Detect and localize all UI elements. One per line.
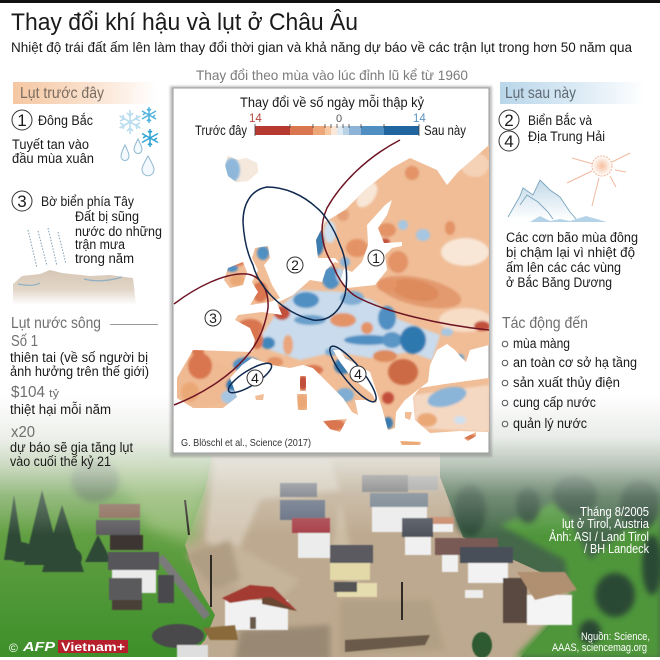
poles (185, 500, 402, 620)
snowmelt text: đầu mùa xuân (12, 151, 94, 166)
Iceland tones (224, 158, 240, 182)
map of Europe (174, 140, 491, 450)
region 3 label: Bờ biển phía Tây (41, 194, 134, 209)
orange patches (274, 306, 290, 320)
logos: AFP (22, 639, 55, 654)
saturated soil text (75, 209, 162, 266)
flood photograph (0, 395, 660, 660)
heading: river floods: Lụt nước sông (11, 315, 101, 332)
flood-timing arcs (174, 140, 489, 407)
heading: impacts: Tác động đến (502, 315, 588, 332)
saturated soil text: trong năm (75, 251, 134, 266)
title: Thay đổi khí hậu và lụt ở Châu Âu (11, 9, 358, 36)
legend: 14 (413, 113, 426, 125)
stat: x20: vào cuối thế kỷ 21 (10, 454, 111, 469)
stat: damage: thiệt hại mỗi năm (10, 402, 111, 417)
flood water (185, 460, 445, 660)
blue patches (293, 292, 319, 308)
panel: later floods (499, 82, 645, 290)
mist fade over photo (0, 395, 660, 535)
logos (9, 639, 128, 655)
top black bar (0, 0, 660, 3)
winter storm text: ở Bắc Băng Dương (506, 275, 612, 290)
photo caption: / BH Landeck (584, 542, 650, 556)
region 1 label: 1 (17, 111, 27, 130)
photo caption: lụt ở Tirol, Austria (562, 517, 649, 531)
heading bar: later floods (500, 82, 645, 104)
hillside left (0, 395, 225, 660)
region 3 label: 3 (17, 192, 27, 211)
stat: x20: x20 (11, 424, 35, 441)
photo caption: Tháng 8/2005 (580, 505, 649, 519)
icon: sun and mountains (508, 153, 630, 222)
houses left (96, 504, 208, 658)
region 3 label (12, 191, 134, 211)
photo caption: Ảnh: ASI / Land Tirol (549, 529, 649, 544)
winter storm text: Các cơn bão mùa đông (506, 230, 638, 245)
photo caption (549, 505, 650, 556)
panel: impacts list (502, 315, 637, 431)
region 2 and 4 labels: Biển Bắc và (528, 113, 592, 128)
impact items: quản lý nước (513, 416, 587, 431)
region markers: 4 (354, 366, 362, 382)
icon: snowflakes and drops (120, 107, 158, 176)
forest right (440, 395, 660, 658)
saturated soil text: Đất bị sũng (75, 209, 139, 224)
region markers: 2 (291, 257, 299, 273)
legend: Sau này (424, 123, 466, 138)
region markers (205, 250, 384, 386)
stat: damage (10, 384, 111, 417)
source: Nguồn: Science, (581, 631, 650, 643)
stat: number one: thiên tai (về số người bị (10, 350, 148, 365)
region 1 label: Đông Bắc (38, 113, 93, 128)
saturated soil text: trận mưa (75, 237, 125, 252)
region 2 and 4 labels: 4 (504, 132, 514, 151)
stat: number one: Số 1 (11, 333, 38, 350)
logos: © (9, 641, 18, 655)
snowmelt text (12, 137, 94, 166)
impact items: an toàn cơ sở hạ tầng (513, 355, 637, 370)
red roof house (203, 585, 297, 640)
logos: Vietnam+ (61, 642, 125, 654)
impact items (502, 336, 637, 431)
region 2 and 4 labels: 2 (504, 111, 514, 130)
stat: number one (10, 333, 149, 379)
stat: number one: ảnh hưởng trên thế giới) (10, 364, 149, 379)
legend (195, 95, 466, 138)
map heading: Thay đổi theo mùa vào lúc đỉnh lũ kể từ 1960 (196, 67, 468, 83)
legend: Thay đổi về số ngày mỗi thập kỷ (240, 95, 424, 110)
houses centre and right (280, 475, 577, 658)
impact items: mùa màng (513, 336, 570, 351)
stat: x20 (10, 424, 133, 469)
ellipse: Adriatic zone (324, 341, 382, 407)
heading bar: earlier floods (13, 82, 157, 104)
source (552, 631, 650, 654)
icon: rain over soil (13, 228, 136, 305)
region markers: 1 (372, 250, 380, 266)
central Europe base (262, 290, 440, 360)
stat: x20: dự báo sẽ gia tăng lụt (10, 440, 133, 455)
region markers: 4 (251, 370, 259, 386)
arc: north-east zone (322, 140, 489, 330)
legend: 14 (249, 113, 262, 125)
white page above photo (0, 3, 660, 395)
fir trees left (4, 490, 112, 572)
region markers: 3 (209, 310, 217, 326)
winter storm text: bị chậm lại vì nhiệt độ (506, 245, 635, 260)
impact items: sản xuất thủy điện (513, 375, 620, 390)
snowmelt text: Tuyết tan vào (12, 137, 89, 152)
winter storm text: ấm lên các các vùng (506, 260, 621, 275)
stat: damage: $104 (11, 384, 45, 401)
impact items: cung cấp nước (513, 395, 596, 410)
heading bar: later floods: Lụt sau này (505, 85, 576, 102)
arc: west coast zone (174, 274, 268, 405)
north and east (356, 182, 378, 208)
region 1 label (12, 110, 93, 130)
region 2 and 4 labels (499, 110, 605, 151)
heading bar: earlier floods: Lụt trước đây (20, 85, 104, 102)
panel: river flood stats (10, 315, 158, 469)
winter storm text (506, 230, 638, 290)
region 2 and 4 labels: Địa Trung Hải (528, 129, 605, 144)
stat: damage: tỷ (49, 388, 60, 400)
subtitle: Nhiệt độ trái đất ấm lên làm thay đổi thời gian và khả năng dự báo về các trận lụt trong hơn 50 năm qua (11, 40, 632, 55)
ellipse: Spain zone (225, 358, 275, 398)
saturated soil text: nước do những (75, 224, 162, 239)
panel: earlier floods (12, 82, 162, 305)
legend: Trước đây (195, 123, 247, 138)
legend: 0 (336, 113, 342, 125)
map credit: G. Blöschl et al., Science (2017) (181, 437, 311, 449)
ellipse: North Sea zone (243, 187, 347, 320)
panel: map (170, 86, 492, 457)
